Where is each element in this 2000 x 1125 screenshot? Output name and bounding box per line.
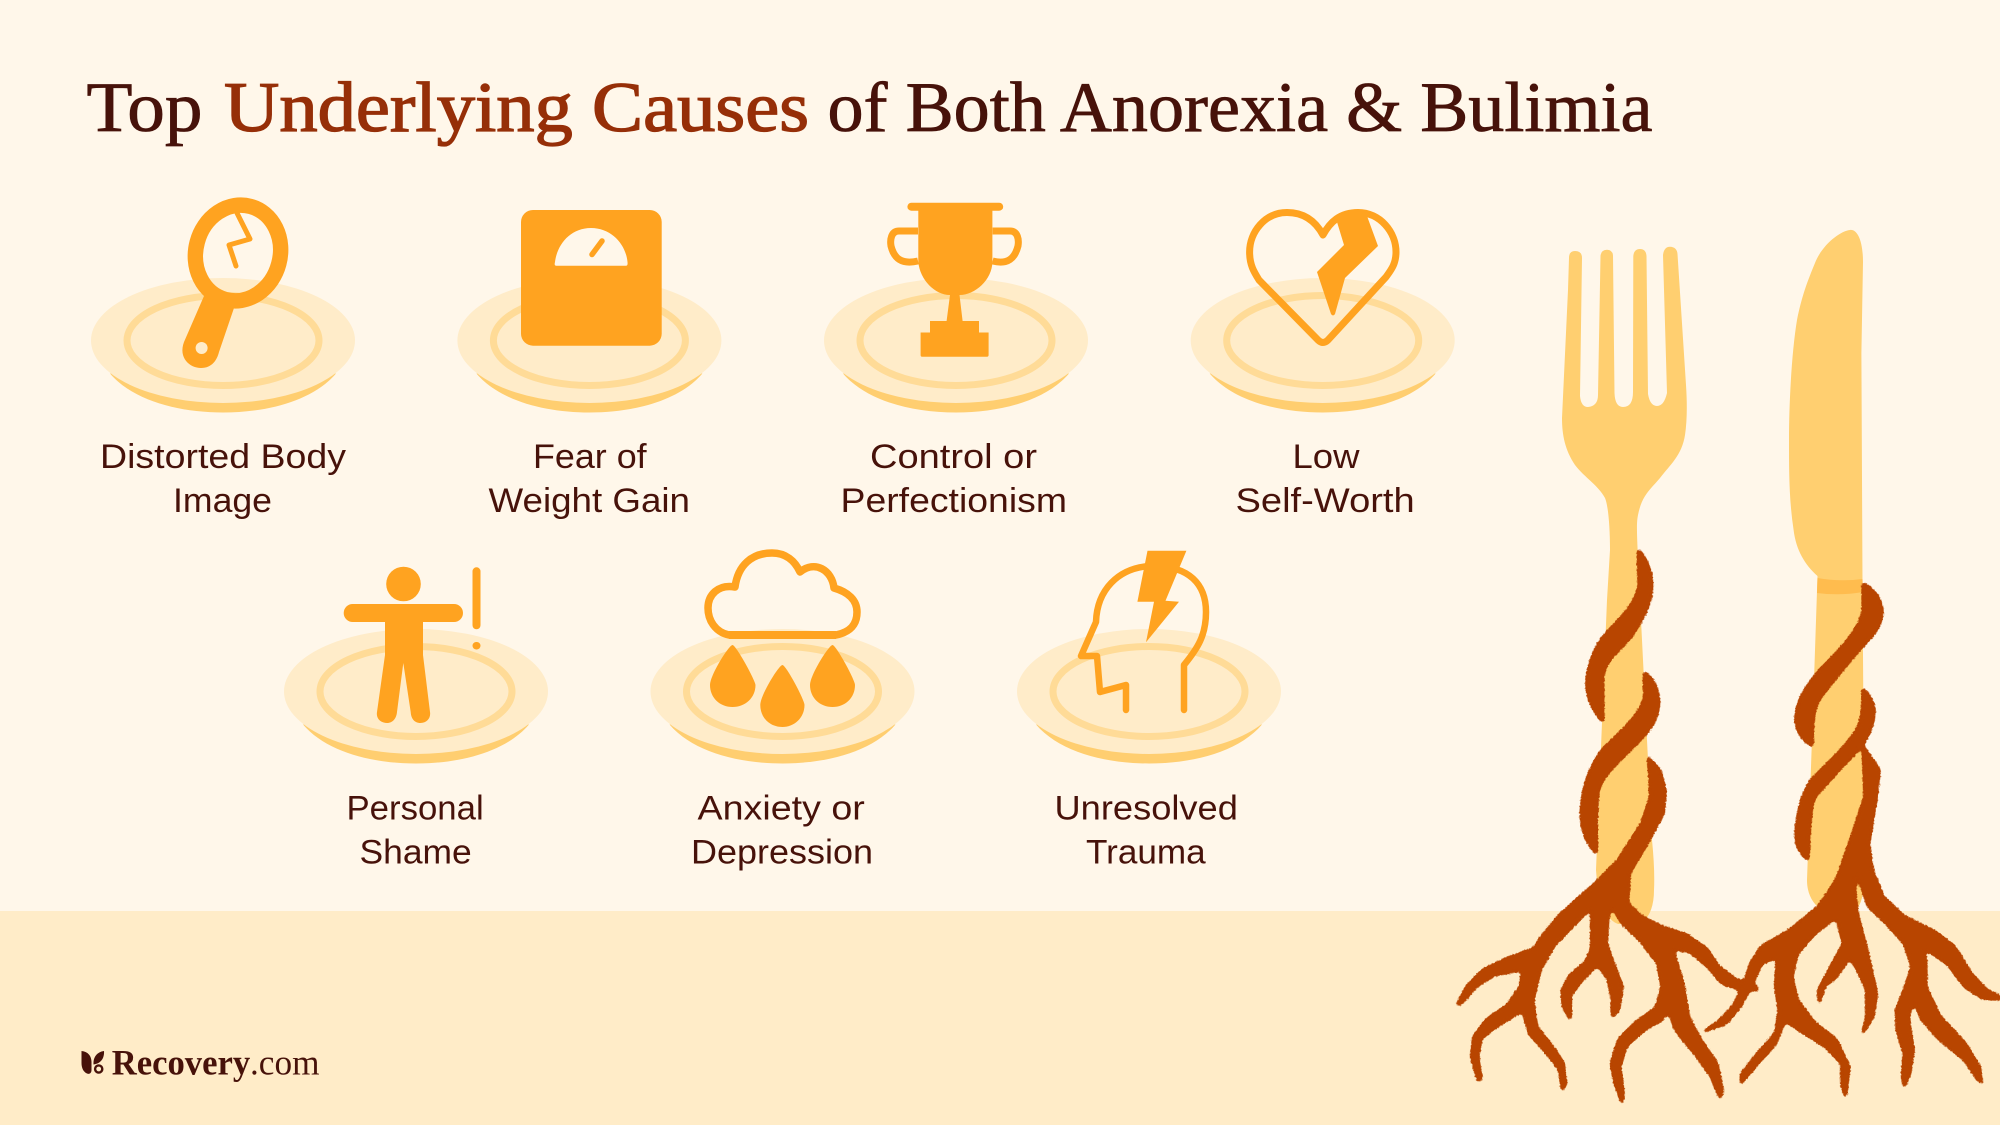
- label: [100, 438, 347, 520]
- title: [86, 69, 1652, 147]
- plate: [284, 629, 548, 764]
- plate: [824, 278, 1088, 412]
- label: Depression: [691, 834, 873, 872]
- label: Fear of: [533, 438, 647, 476]
- item: distorted body image: [91, 196, 355, 520]
- label: Shame: [360, 834, 472, 872]
- label: [691, 789, 873, 872]
- logo: Recovery.com: Recovery: [112, 1042, 250, 1082]
- title: Underlying Causes: [224, 69, 809, 147]
- icon: head with lightning bolt: [1081, 551, 1206, 710]
- label: [840, 438, 1067, 520]
- icon: cracked hand mirror: [182, 196, 291, 368]
- label: Distorted Body: [100, 438, 347, 476]
- label: Low: [1292, 438, 1360, 476]
- ground band: [0, 911, 2000, 1125]
- fork vine upper strand: [1587, 550, 1652, 722]
- plate: [1017, 629, 1281, 764]
- icon: person with exclamation mark: [344, 567, 480, 723]
- knife vine middle strand: [1796, 689, 1874, 860]
- icon: rain cloud: [708, 553, 857, 727]
- label: Personal: [346, 789, 484, 827]
- logo: Recovery.com: .com: [250, 1042, 320, 1082]
- label: Weight Gain: [488, 482, 690, 520]
- title: of Both Anorexia & Bulimia: [828, 69, 1652, 147]
- icon: broken heart: [1250, 212, 1396, 342]
- label: Perfectionism: [840, 482, 1067, 520]
- plate: [91, 278, 355, 412]
- label: [1054, 789, 1238, 872]
- label: Anxiety or: [698, 789, 865, 827]
- plate: [650, 629, 914, 764]
- label: Self-Worth: [1236, 482, 1415, 520]
- label: [1236, 438, 1415, 520]
- illustration: knife: [1789, 230, 1864, 915]
- knife root system: [1704, 747, 2000, 1097]
- icon: bathroom scale: [521, 210, 662, 346]
- label: Trauma: [1086, 834, 1207, 872]
- plate: [457, 278, 721, 412]
- icon: trophy: [891, 203, 1018, 357]
- item: fear of weight gain: [457, 210, 721, 520]
- item: low self-worth: [1191, 212, 1455, 520]
- label: [488, 438, 690, 520]
- label: Control or: [870, 438, 1037, 476]
- item: anxiety or depression: [650, 553, 914, 872]
- fork vine middle strand: [1581, 673, 1659, 853]
- fork root system: [1457, 757, 1759, 1103]
- knife vine upper strand: [1796, 583, 1882, 746]
- logo mark: [82, 1051, 104, 1074]
- label: Unresolved: [1054, 789, 1238, 827]
- illustration: roots wrapped around cutlery: [1457, 550, 2000, 1103]
- plate: [1191, 278, 1455, 412]
- label: Image: [173, 482, 272, 520]
- illustration: fork: [1562, 247, 1687, 924]
- label: [346, 789, 484, 872]
- logo: Recovery.com: [82, 1042, 320, 1082]
- item: unresolved trauma: [1017, 551, 1281, 872]
- item: personal shame: [284, 567, 548, 872]
- item: control or perfectionism: [824, 203, 1088, 520]
- title: Top: [86, 69, 202, 147]
